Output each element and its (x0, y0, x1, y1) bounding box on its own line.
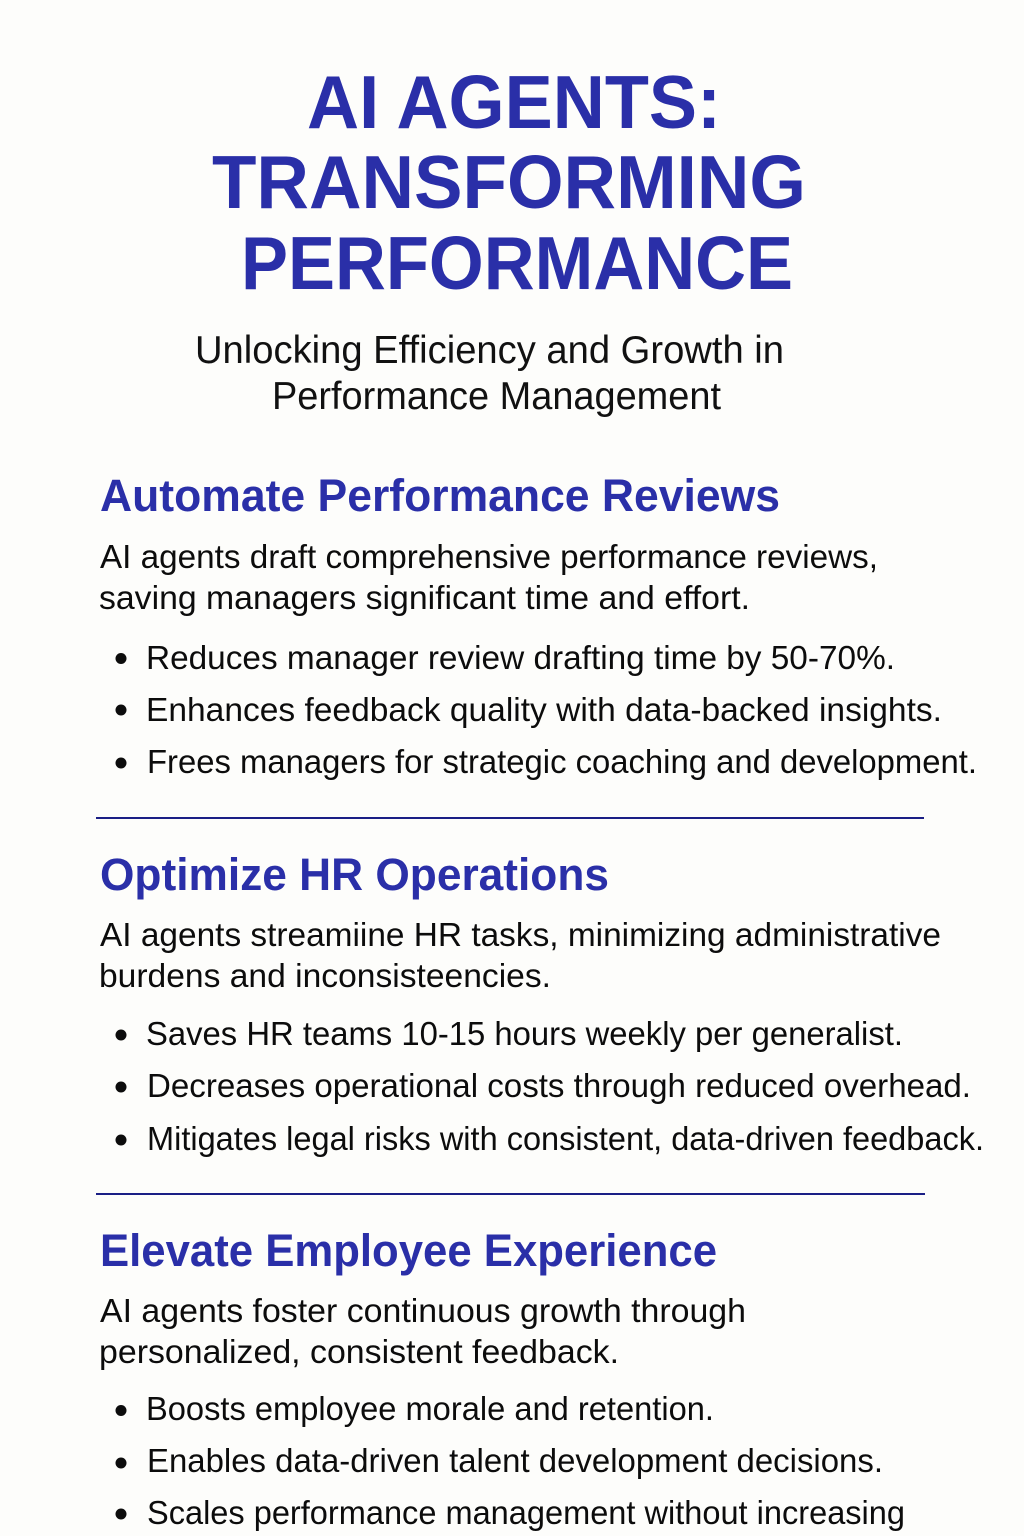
bullet list: automate benefits: Frees managers for strategic coaching and development. (147, 743, 977, 780)
bullet list: elevate benefits (116, 1390, 905, 1531)
heading: automate performance reviews: Automate Performance Reviews (100, 470, 780, 521)
heading: elevate employee experience: Elevate Employee Experience (100, 1225, 717, 1276)
text block: optimize intro: burdens and inconsisteencies. (99, 957, 551, 994)
text block: automate intro: saving managers significant time and effort. (99, 579, 750, 616)
subtitle (195, 329, 784, 418)
text block: elevate intro: personalized, consistent feedback. (99, 1333, 619, 1370)
bullet list: automate benefits: Reduces manager review drafting time by 50-70%. (146, 639, 895, 676)
bullet list: elevate benefits: Boosts employee morale and retention. (146, 1390, 714, 1427)
title: AI AGENTS: (307, 60, 721, 144)
text block: automate intro (99, 538, 878, 616)
bullet list: elevate benefits: Enables data-driven talent development decisions. (147, 1442, 883, 1479)
title: PERFORMANCE (241, 221, 793, 305)
title (212, 60, 806, 305)
panel: optimize hr operations (99, 849, 984, 1157)
text block: elevate intro: AI agents foster continuous growth through (100, 1292, 746, 1329)
subtitle: Performance Management (272, 375, 721, 418)
subtitle: Unlocking Efficiency and Growth in (195, 329, 784, 372)
bullet list: optimize benefits (116, 1015, 984, 1157)
text block: optimize intro (99, 916, 941, 994)
text block: elevate intro (99, 1292, 746, 1370)
bullet list: optimize benefits: Decreases operational costs through reduced overhead. (147, 1067, 971, 1104)
bullet list: elevate benefits: Scales performance management without increasing (147, 1494, 905, 1531)
bullet list: optimize benefits: Mitigates legal risks with consistent, data-driven feedback. (147, 1120, 984, 1157)
bullet list: automate benefits (116, 639, 977, 780)
panel: automate performance reviews (99, 470, 977, 780)
heading: optimize hr operations: Optimize HR Operations (100, 849, 609, 900)
text block: optimize intro: AI agents streamiine HR tasks, minimizing administrative (100, 916, 941, 953)
panel: elevate employee experience (99, 1225, 905, 1531)
bullet list: automate benefits: Enhances feedback quality with data-backed insights. (146, 691, 942, 728)
bullet list: optimize benefits: Saves HR teams 10-15 hours weekly per generalist. (146, 1015, 903, 1052)
title: TRANSFORMING (212, 140, 806, 224)
text block: automate intro: AI agents draft comprehensive performance reviews, (100, 538, 878, 575)
